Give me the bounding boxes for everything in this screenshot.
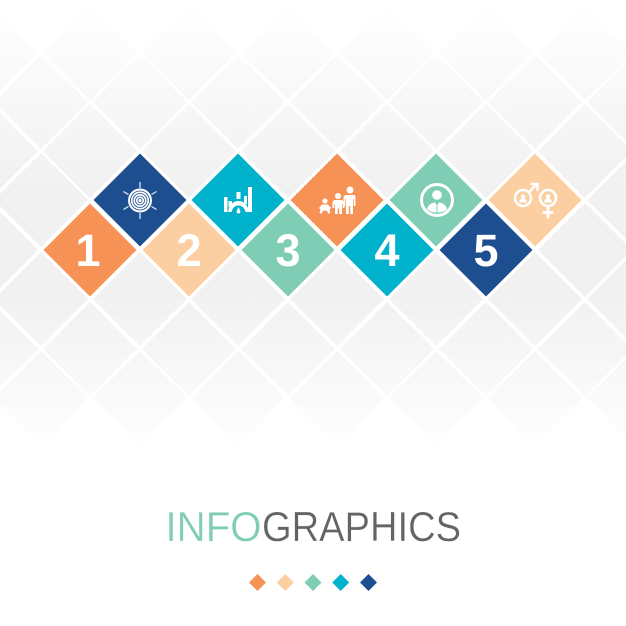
item 2: peach number diamond: 2 [176,225,202,276]
icon diamond 4: green with person in circle [390,154,482,246]
item 5: navy number diamond [440,204,532,296]
item 4: teal number diamond [340,204,434,296]
item 3: green number diamond: 3 [275,225,301,276]
background diamond grid [0,6,626,445]
item 1: orange number diamond [44,204,136,296]
item 1: orange number diamond: 1 [75,225,101,276]
icon: bars and arc [224,187,252,214]
item 3: green number diamond [242,204,334,296]
item 5: navy number diamond: 5 [473,225,499,276]
icon diamond 1: navy with radar target [94,154,186,246]
legend diamonds [249,574,377,591]
title: GRAPHICS [262,503,461,550]
icon: gender symbols [515,184,556,218]
title: INFO [166,503,262,550]
item 4: teal number diamond: 4 [374,225,400,276]
title [166,503,461,550]
item 2: peach number diamond [142,204,236,296]
icon: family figures [319,186,356,214]
icon diamond 5: peach with gender symbols [488,154,582,246]
icon diamond 3: orange with family [290,154,384,246]
icon: person in circle [422,184,452,216]
icon: radar target [124,182,156,219]
icon diamond 2: teal with bars and arc [192,154,284,246]
